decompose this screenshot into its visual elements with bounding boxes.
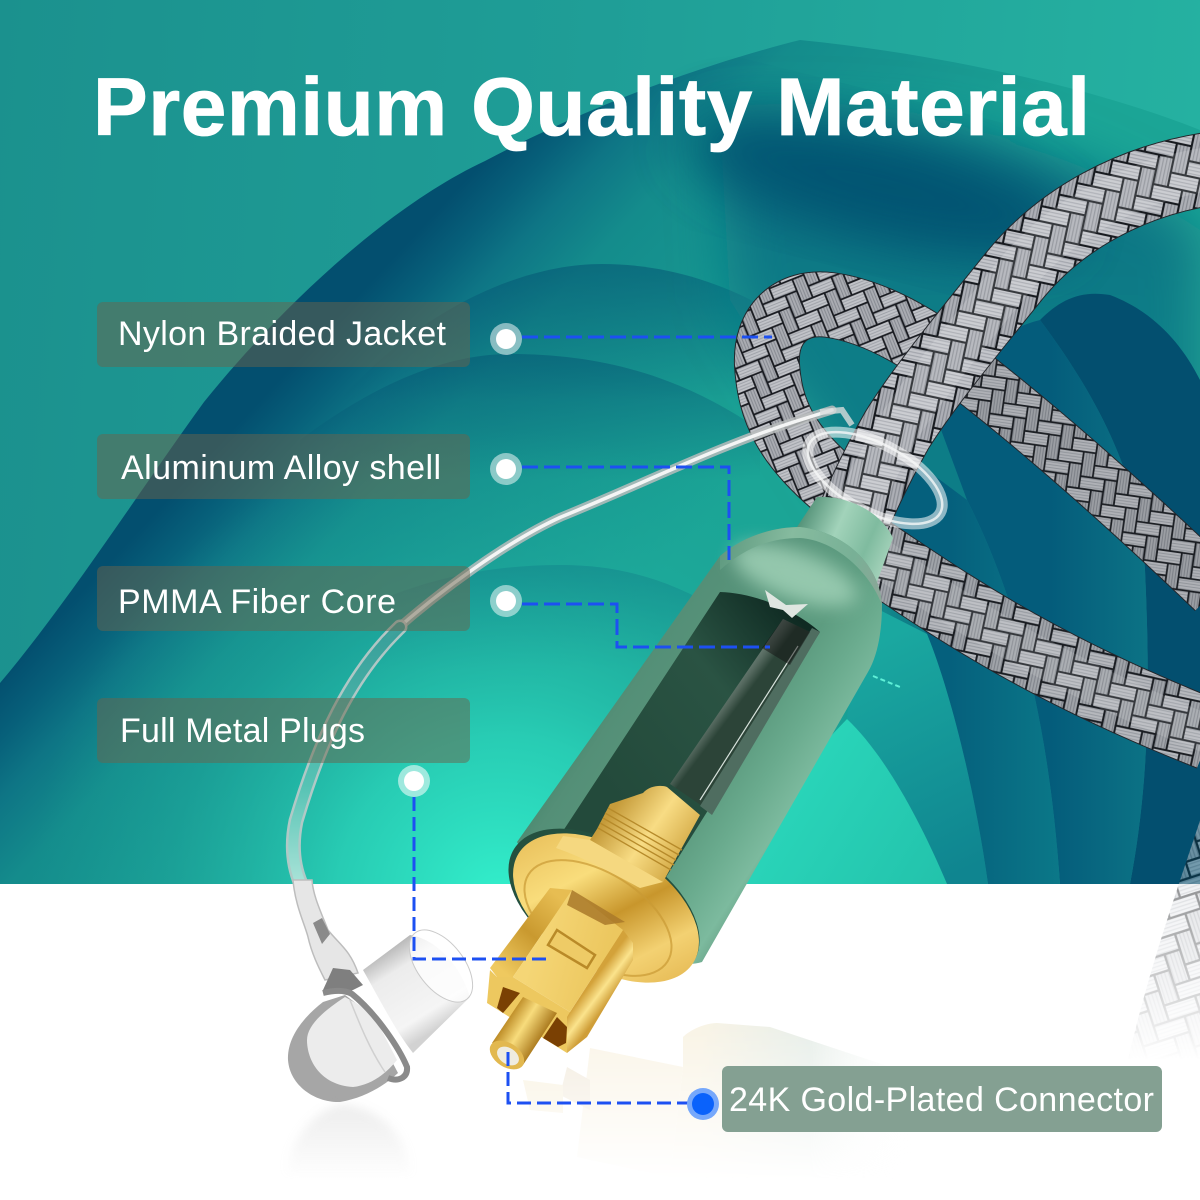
gold flange: [482, 797, 726, 1013]
leader: full metal plugs: [414, 797, 550, 959]
leader: PMMA fiber core: [522, 604, 770, 647]
gold threaded nut: [556, 786, 700, 888]
label: 24K Gold-Plated Connector: 24K Gold-Plated Connector: [729, 1081, 1154, 1119]
clear dust-cap strap: [293, 410, 832, 884]
leader: gold-plated connector: [508, 1052, 690, 1103]
strap ring around cable: [794, 410, 956, 543]
marker dot: gold connector: [687, 1088, 719, 1120]
label: Full Metal Plugs: [97, 698, 470, 763]
label: PMMA Fiber Core: [97, 566, 470, 631]
plug key slot: [548, 930, 595, 968]
title: Premium Quality Material: [93, 62, 1090, 153]
cable: lower strand behind connector: [860, 545, 1200, 735]
plug left face: [490, 888, 572, 977]
label: Full Metal Plugs: Full Metal Plugs: [120, 712, 365, 750]
PMMA fiber core: [670, 619, 810, 806]
strap tail on white ground: [293, 880, 358, 980]
fiber pin: [492, 997, 557, 1065]
leader: aluminum alloy shell: [522, 467, 729, 560]
marker dot: nylon: [490, 323, 522, 355]
cable: top strand entering the connector: [848, 168, 1200, 530]
label: Aluminum Alloy shell: [97, 434, 470, 499]
marker dot: metal plugs: [398, 765, 430, 797]
cable: loop at the crossing: [767, 304, 960, 490]
plug front face: [487, 970, 570, 1053]
plug top face: [513, 890, 623, 1012]
shell window cut-out: [563, 592, 820, 882]
label: Nylon Braided Jacket: Nylon Braided Jacket: [118, 315, 447, 353]
floor reflections: [303, 1023, 850, 1146]
aluminum connector shell: [517, 497, 893, 964]
marker dot: PMMA: [490, 585, 522, 617]
label: PMMA Fiber Core: PMMA Fiber Core: [118, 583, 396, 621]
cable: right strand passing behind the top strand: [930, 345, 1200, 590]
marker dot: aluminum: [490, 453, 522, 485]
label: Nylon Braided Jacket: [97, 302, 470, 367]
icon: logo mark on shell: [765, 590, 808, 618]
label: 24K Gold-Plated Connector: [722, 1066, 1162, 1132]
clear dust cap: [288, 919, 485, 1102]
leader: nylon braided jacket: [522, 336, 772, 338]
label: Aluminum Alloy shell: Aluminum Alloy shell: [121, 449, 441, 487]
faded braided cable, lower right: [1190, 800, 1200, 1080]
gold optical plug: [485, 888, 633, 1075]
plug right face: [567, 930, 633, 1053]
